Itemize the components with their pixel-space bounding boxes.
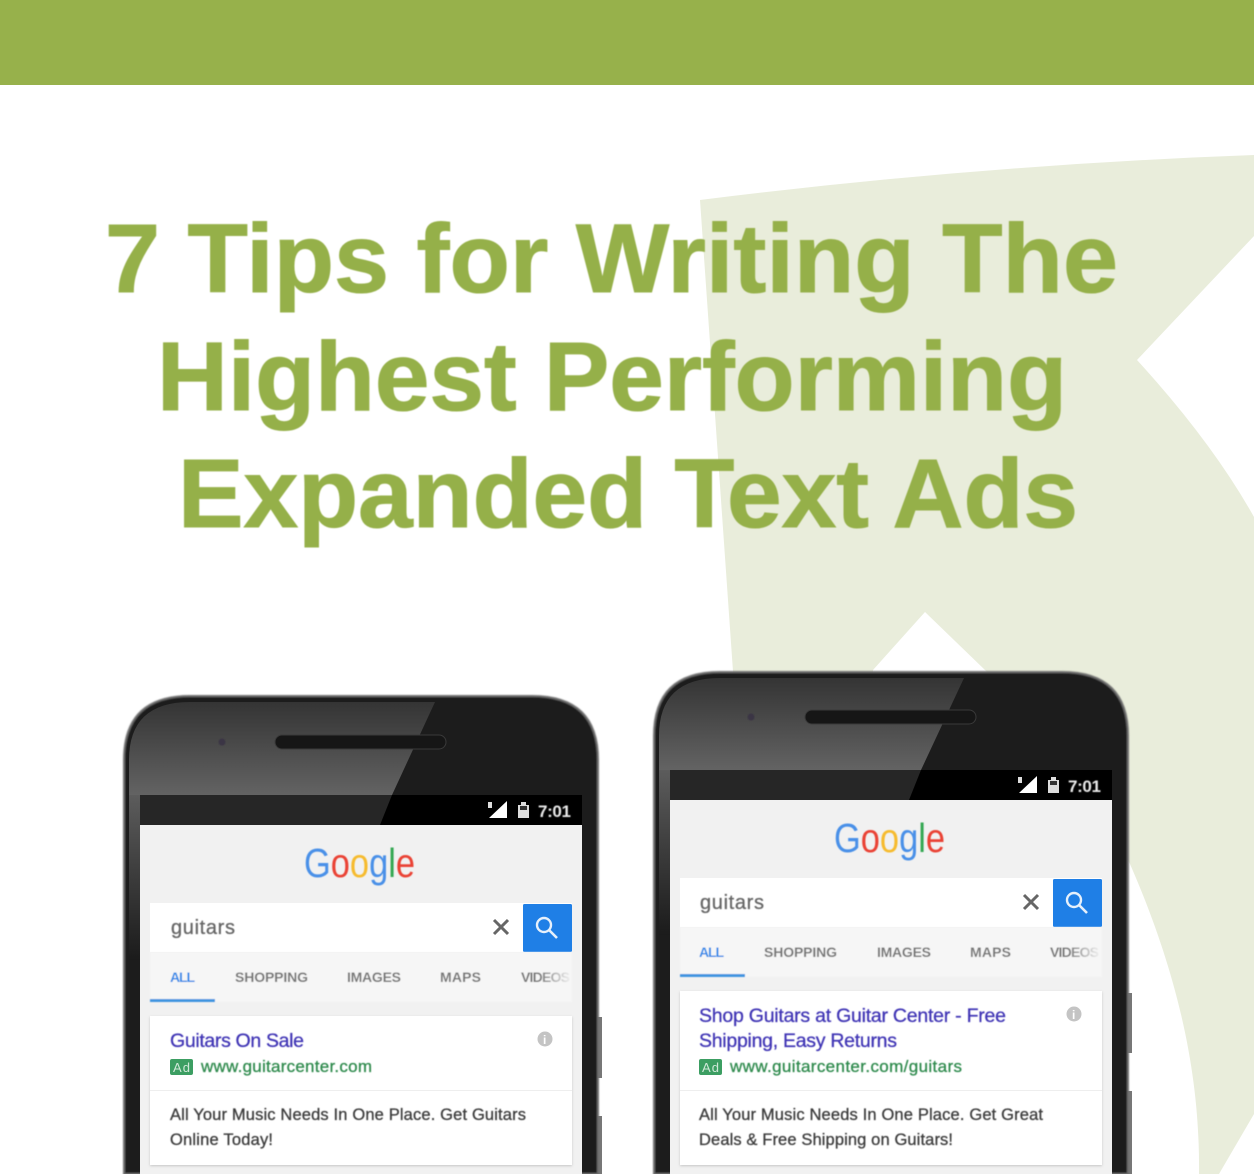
earpiece speaker	[275, 735, 446, 749]
background leaf shape	[700, 155, 1254, 1174]
status bar: 7:01	[1068, 777, 1101, 796]
top green band	[0, 0, 1254, 85]
search box: guitars	[700, 892, 764, 914]
search box	[150, 903, 572, 952]
title line 2: Highest Performing	[157, 322, 1067, 431]
result tabs	[150, 952, 572, 1002]
left bezel strip	[129, 795, 140, 960]
search box	[680, 878, 1102, 927]
front camera	[218, 738, 226, 746]
screen	[670, 800, 1112, 1174]
ad card: Deals & Free Shipping on Guitars!	[699, 1131, 953, 1149]
result tabs: MAPS	[970, 944, 1011, 960]
result tabs: VIDEOS	[521, 969, 570, 985]
ad card	[150, 1016, 572, 1165]
result tabs: ALL	[699, 944, 724, 960]
screen	[140, 825, 582, 1174]
title	[105, 204, 1118, 548]
result tabs	[680, 927, 1102, 977]
bezel glare	[129, 702, 435, 795]
left bezel strip	[659, 770, 670, 935]
phone body	[654, 672, 1128, 1174]
ad card: Ad	[173, 1060, 190, 1075]
bezel glare	[659, 678, 964, 770]
ad card: www.guitarcenter.com	[200, 1057, 372, 1076]
ad card: All Your Music Needs In One Place. Get Great	[699, 1106, 1043, 1124]
ad card: i	[543, 1033, 546, 1047]
status bar	[140, 795, 582, 825]
ad card: Guitars On Sale	[170, 1030, 304, 1052]
ad card	[680, 991, 1102, 1165]
side buttons	[597, 1017, 602, 1174]
result tabs: MAPS	[440, 969, 481, 985]
title line 3: Expanded Text Ads	[178, 439, 1078, 548]
phone body	[124, 696, 598, 1174]
result tabs: SHOPPING	[764, 944, 837, 960]
result tabs: ALL	[170, 969, 195, 985]
ad card: Online Today!	[170, 1131, 273, 1149]
Google logo: Google	[834, 815, 945, 861]
title line 1: 7 Tips for Writing The	[105, 204, 1118, 313]
search box: guitars	[171, 917, 235, 939]
result tabs: VIDEOS	[1050, 944, 1099, 960]
result tabs: SHOPPING	[235, 969, 308, 985]
ad card: i	[1072, 1008, 1075, 1022]
result tabs: IMAGES	[877, 944, 931, 960]
result tabs: IMAGES	[347, 969, 401, 985]
earpiece speaker	[805, 710, 976, 724]
ad card: Ad	[702, 1060, 719, 1075]
status bar	[670, 770, 1112, 800]
side buttons	[1127, 993, 1132, 1174]
phone: left, Guitars On Sale ad	[124, 696, 602, 1174]
Google logo: Google	[304, 840, 415, 886]
front camera	[748, 714, 754, 720]
ad card: Shipping, Easy Returns	[699, 1030, 897, 1052]
status bar: 7:01	[538, 802, 571, 821]
ad card: Shop Guitars at Guitar Center - Free	[699, 1005, 1006, 1027]
ad card: www.guitarcenter.com/guitars	[729, 1057, 962, 1076]
ad card: All Your Music Needs In One Place. Get Guitars	[170, 1106, 526, 1124]
phone: right, Shop Guitars ad	[654, 672, 1132, 1174]
